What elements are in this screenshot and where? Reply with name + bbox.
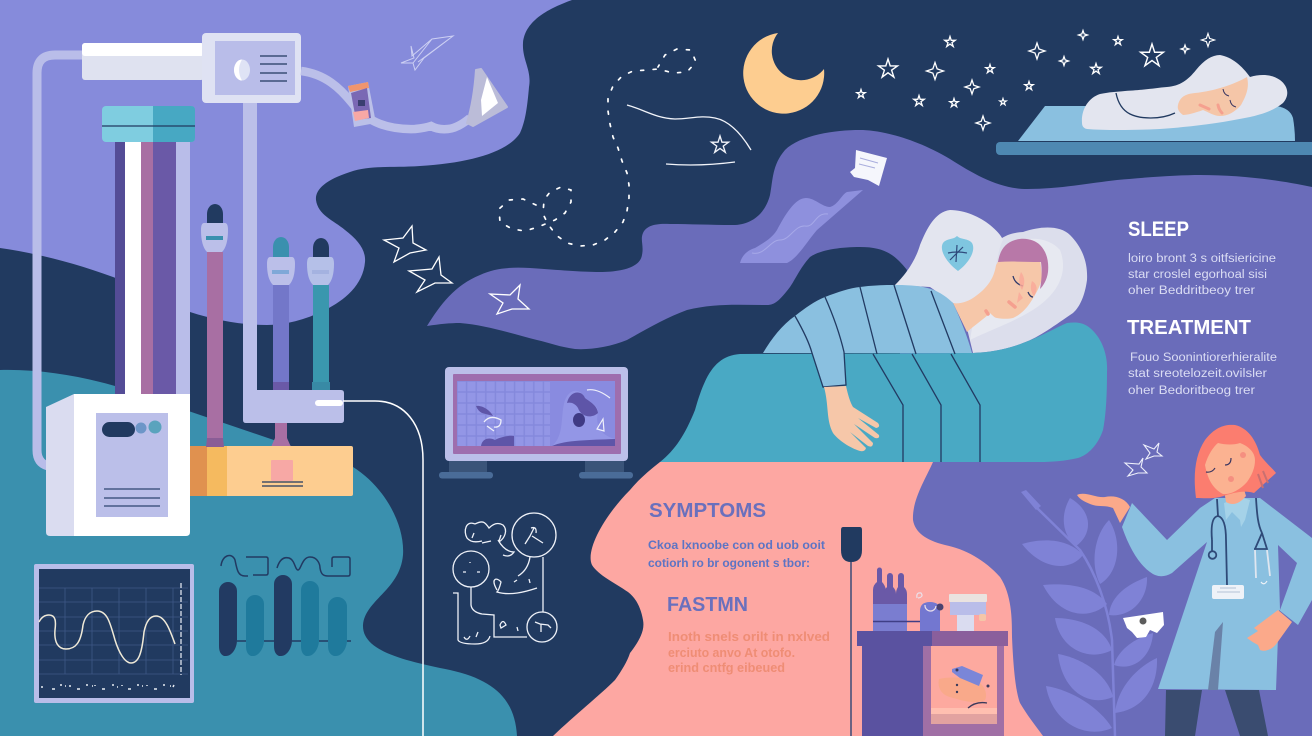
text block: sleep: oher Beddritbeoy trer: [1128, 285, 1255, 297]
connections: [453, 540, 543, 644]
screen grid: [457, 381, 615, 446]
text block: symptoms: cotiorh ro br ogonent s tbor:: [648, 556, 810, 570]
sampling rod: violet: [267, 237, 295, 390]
shirt and blanket fold lines: [795, 285, 980, 462]
text block: sleep: star croslel egorhoal sisi: [1128, 269, 1267, 281]
text block: treatment: oher Bedoritbeog trer: [1128, 385, 1255, 397]
stem: [1036, 507, 1115, 736]
sampling rod: teal: [307, 238, 334, 390]
lowered hand: [1247, 610, 1292, 651]
base highlight: [315, 400, 343, 406]
hair: [998, 239, 1048, 289]
vertical pipe and L base: [243, 100, 344, 423]
node top: [512, 513, 556, 557]
badge: [1212, 585, 1244, 599]
text block: treatment: stat sreotelozeit.ovilsler: [1128, 368, 1267, 380]
base connector: [271, 423, 291, 447]
probe: [467, 69, 507, 126]
white cabinet: [46, 394, 190, 536]
closed eyes: [1206, 458, 1231, 472]
background: teal hill: [0, 370, 517, 736]
plant: [1021, 490, 1157, 736]
lower squiggle: [494, 579, 537, 594]
star 1: [384, 226, 426, 262]
text block: symptoms: Ckoa lxnoobe con od uob ooit: [648, 538, 825, 552]
blanket and pillow: [1082, 55, 1287, 130]
wave above bars: [221, 555, 350, 576]
shirt body: [763, 285, 972, 353]
background: pink panel: [553, 462, 1043, 736]
legs: [1165, 690, 1268, 736]
sampling rod: mauve: [201, 204, 228, 447]
hand: [824, 386, 879, 451]
bottles: [873, 568, 940, 631]
background: purple wave: [427, 130, 1312, 736]
table left cabinet: [862, 646, 923, 736]
heading: treatment: TREATMENT: [1127, 317, 1251, 339]
pillow highlight: [970, 239, 1063, 340]
column stripes: [115, 142, 190, 395]
scan blob right: [552, 390, 615, 446]
hair strands: [1258, 471, 1268, 488]
coat side fold: [1278, 545, 1297, 610]
hair: [1195, 425, 1276, 498]
cheek and mouth: [1200, 105, 1222, 113]
scan blob left: [476, 406, 514, 446]
white tag on plant: [1123, 612, 1164, 638]
cheeks, nose, mouth: [1017, 272, 1037, 303]
face: [1205, 443, 1255, 494]
text block: treatment: Fouo Soonintiorerhieralite: [1130, 352, 1277, 364]
dashed flight path: [499, 49, 696, 246]
stem tip: [1021, 490, 1041, 510]
shirt sleeve: [795, 297, 846, 387]
star 2: [409, 257, 452, 292]
heading: sleep: SLEEP: [1128, 218, 1189, 241]
pole: [850, 562, 852, 736]
crescent moon: [743, 33, 824, 114]
node left: [453, 551, 489, 587]
closed eyes: [1013, 276, 1033, 297]
table with supplies: [841, 527, 1008, 736]
column cap: [102, 106, 195, 142]
paper plane sketch: [401, 36, 453, 70]
cup: [917, 593, 944, 631]
star: [1144, 443, 1162, 459]
stands: [439, 461, 633, 478]
chart dots: [42, 685, 174, 689]
heart emblem: [942, 236, 973, 271]
right scan area: [550, 381, 615, 446]
leaves: [1064, 498, 1088, 546]
frame: [445, 367, 628, 461]
hose to probe: [301, 71, 470, 129]
closed eyes: [1223, 89, 1236, 107]
small stars by doctor: [1125, 443, 1162, 476]
blanket: [660, 323, 1107, 462]
outline stars left: [384, 226, 529, 314]
small star: [711, 136, 729, 152]
bar chart: [219, 555, 351, 656]
coat slit: [1208, 622, 1223, 690]
main sleeping patient: [660, 210, 1107, 462]
face: [1178, 77, 1248, 116]
raised hand: [1077, 494, 1130, 523]
neck and face: [953, 258, 1042, 332]
top sleeper on mattress: [996, 55, 1312, 155]
node glyphs: [463, 528, 551, 639]
background: periwinkle wave: [0, 0, 572, 325]
dream wave ribbon: [740, 190, 863, 263]
star 3: [490, 285, 529, 314]
white hood: [895, 210, 1003, 303]
lamp: [949, 594, 987, 631]
upper blob: [465, 522, 506, 543]
stethoscope: [1209, 498, 1270, 585]
text block: fastmn: erind cntfg eibeued: [668, 661, 785, 675]
baseline: [237, 640, 351, 642]
collar: [1224, 497, 1250, 527]
doctor: [1077, 425, 1312, 736]
hose tag: [348, 82, 376, 127]
waveform chart: [34, 564, 194, 703]
bars: [219, 582, 237, 656]
orange control box: [190, 446, 353, 496]
mattress: [1018, 106, 1295, 141]
table right frame: [923, 646, 1004, 736]
white horizontal bar: [82, 43, 204, 80]
heading: fastmn: FASTMN: [667, 594, 748, 616]
network line diagram: [453, 513, 557, 644]
constellation lines: [627, 105, 751, 165]
pig figure in cabinet: [939, 666, 990, 708]
neck: [1224, 486, 1246, 504]
white wire: [343, 401, 423, 736]
text block: sleep: loiro bront 3 s oitfsiericine: [1128, 253, 1276, 265]
arm line: [1116, 93, 1175, 118]
text block: fastmn: Inoth snels orilt in nxlved: [668, 630, 830, 644]
floating note: [850, 150, 887, 186]
heading: symptoms: SYMPTOMS: [649, 500, 766, 522]
table top: [857, 631, 1008, 646]
left tube: [37, 55, 82, 466]
star field: [857, 30, 1214, 130]
chart scale: [180, 583, 182, 675]
pole head: [841, 527, 862, 562]
platform: [996, 142, 1312, 155]
pillow: [960, 227, 1087, 353]
head unit: [202, 33, 301, 103]
node bottom: [527, 612, 557, 642]
star: [1125, 458, 1147, 476]
medical machine: [37, 33, 507, 536]
coat: [1122, 498, 1312, 690]
chart curve: [39, 611, 175, 663]
cheeks: [1228, 452, 1246, 482]
monitor: [439, 367, 633, 478]
text block: fastmn: erciuto anvo At otofo.: [668, 646, 795, 660]
